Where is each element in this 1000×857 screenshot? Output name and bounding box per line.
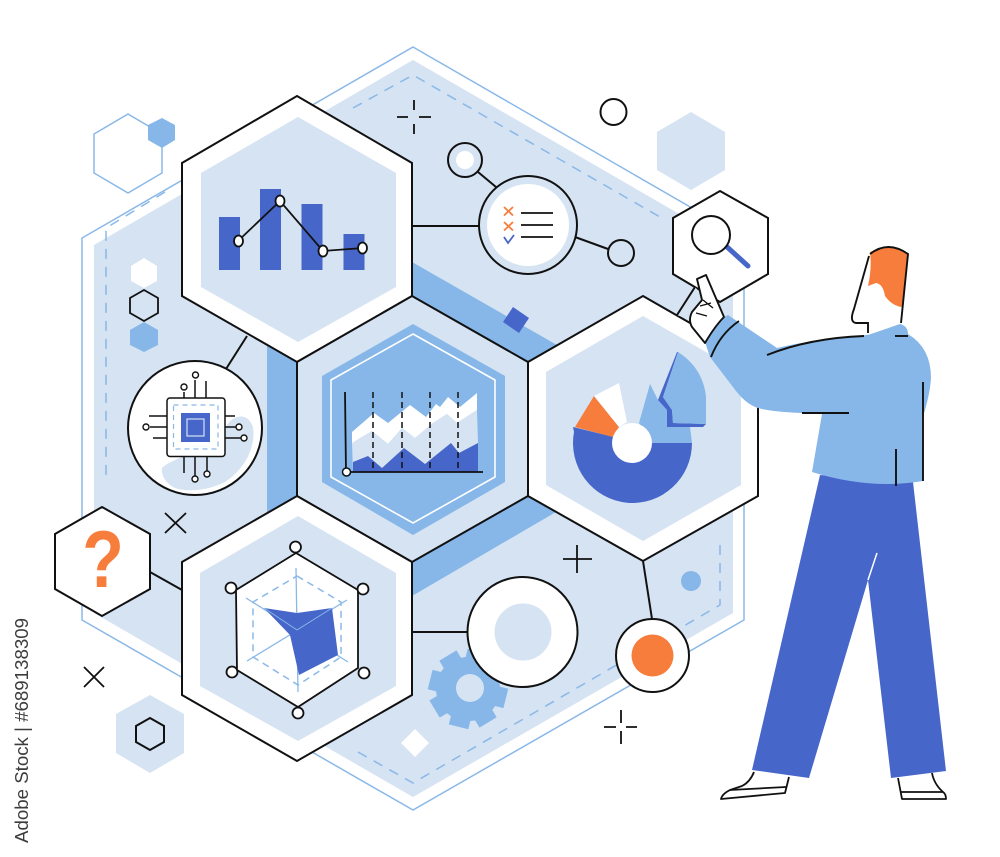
small plain circle xyxy=(600,99,626,125)
background hexagon frame xyxy=(82,47,744,810)
decorative hexagon: top left outline xyxy=(94,114,175,193)
mid-blue diagonal bands xyxy=(267,262,557,596)
circle: checklist xyxy=(479,176,577,274)
circle: bottom donut xyxy=(468,577,578,687)
person pointing at hexagon xyxy=(677,247,946,799)
axes and gridlines xyxy=(342,392,483,476)
bars xyxy=(219,189,364,270)
node circle: right xyxy=(608,240,634,266)
connector from hexagon to hand xyxy=(677,287,702,320)
blue square marker xyxy=(503,307,529,333)
exploded slice xyxy=(658,352,706,427)
white diamond xyxy=(401,729,429,757)
hexagon: question mark xyxy=(55,507,150,616)
hexagon: magnifying glass xyxy=(673,191,768,302)
hexagon panel: bar chart xyxy=(182,96,412,362)
decorative hexagon: bottom left xyxy=(116,695,184,773)
hexagon panel: pie chart xyxy=(528,296,758,561)
head and neck xyxy=(852,247,908,335)
hand xyxy=(690,275,724,343)
trend line with points xyxy=(234,196,367,256)
small blue dot xyxy=(681,571,701,591)
hexagon panel: area chart xyxy=(297,296,528,562)
stock watermark caption: Adobe Stock | #689138309 xyxy=(12,618,32,843)
connector lines xyxy=(150,172,652,632)
pie slices xyxy=(573,427,692,503)
sweater fold lines xyxy=(711,321,923,486)
shoes xyxy=(721,772,946,799)
decorative hexagon: top right xyxy=(657,112,725,190)
decorative marks: crosses and plus signs xyxy=(84,100,637,744)
circle: orange target xyxy=(616,619,689,692)
small hexagon stack on left xyxy=(130,258,158,352)
node circle: top xyxy=(448,143,482,177)
trousers xyxy=(752,475,946,778)
gear icon xyxy=(428,649,508,729)
hexagon panel: radar chart xyxy=(182,496,412,761)
sweater xyxy=(705,315,931,484)
circle: microchip xyxy=(128,361,262,495)
hexagon: question mark: ? xyxy=(82,513,124,604)
area series xyxy=(352,410,478,472)
